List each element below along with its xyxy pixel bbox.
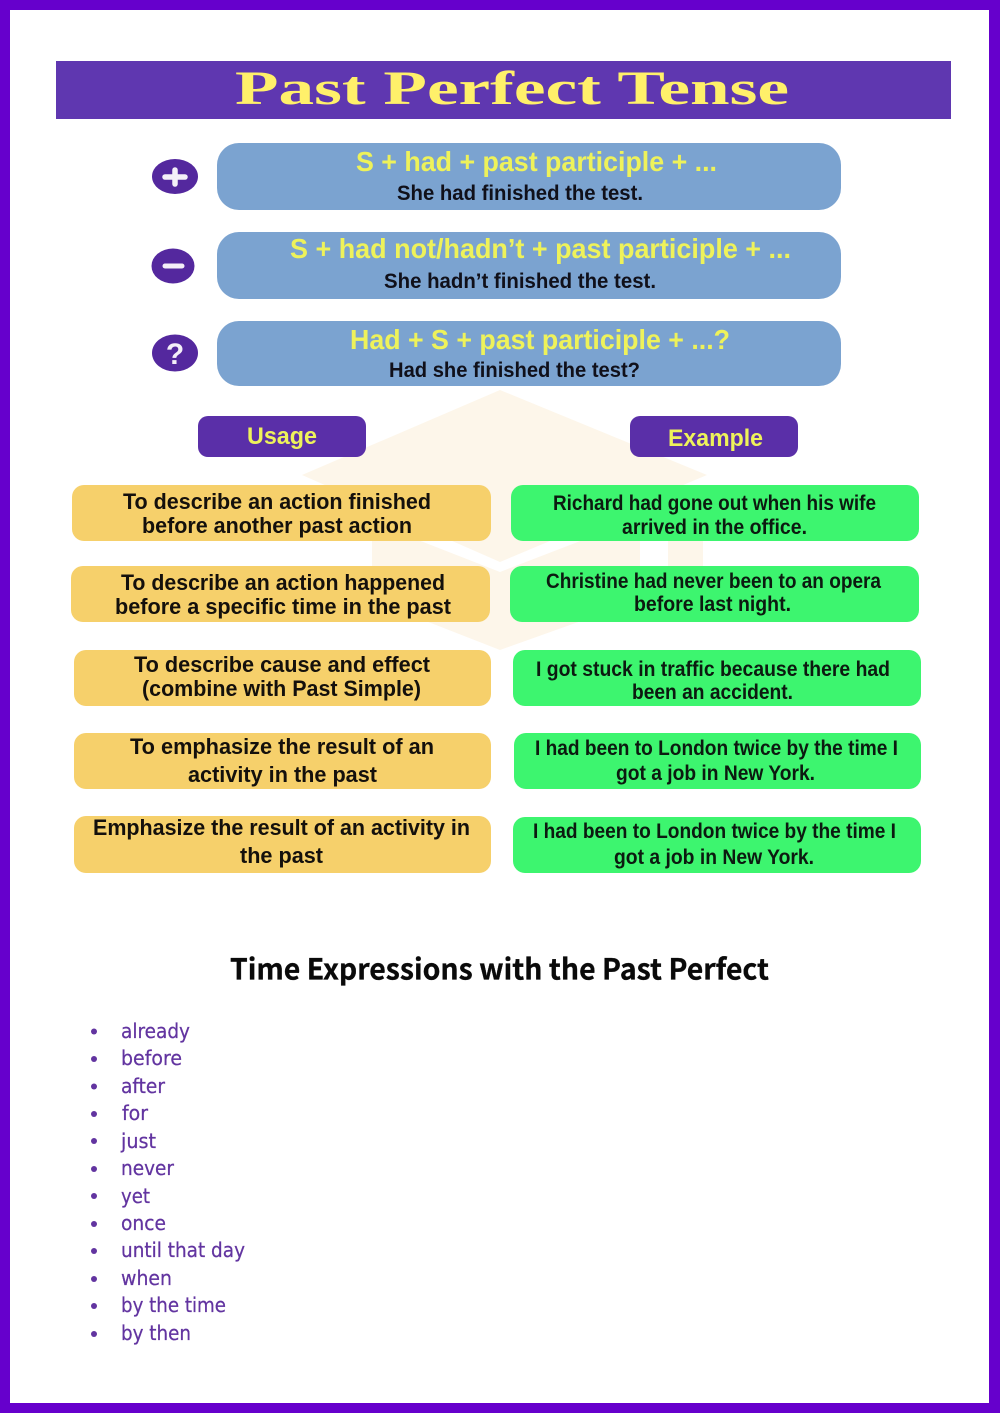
- usage heading: Usage: [247, 423, 317, 450]
- example card 5: got a job in New York.: [614, 846, 814, 869]
- usage card 2: To describe an action happened: [121, 570, 445, 595]
- time expressions list: yet: [121, 1184, 150, 1208]
- time expressions list: by then: [121, 1321, 191, 1345]
- example card 2: [510, 566, 919, 622]
- usage card 5: Emphasize the result of an activity in: [93, 815, 470, 840]
- example card 4: got a job in New York.: [616, 762, 815, 785]
- watermark: graduation cap: [302, 390, 707, 650]
- title banner: [56, 61, 951, 119]
- time expressions list: [91, 1019, 245, 1345]
- example card 3: been an accident.: [632, 681, 793, 704]
- negative box: [217, 232, 841, 299]
- time expressions list: already: [121, 1019, 190, 1043]
- usage card 1: before another past action: [142, 513, 412, 538]
- title: Past Perfect Tense: [235, 62, 789, 115]
- panel: positive form: [152, 143, 841, 210]
- usage card 3: (combine with Past Simple): [142, 676, 421, 701]
- time expressions list: for: [122, 1101, 149, 1125]
- usage card 1: [72, 485, 491, 541]
- icon: question mark: ?: [166, 338, 184, 371]
- example card 2: Christine had never been to an opera: [546, 570, 881, 593]
- usage card 1: To describe an action finished: [123, 489, 431, 514]
- usage card 3: To describe cause and effect: [134, 652, 431, 677]
- negative formula: S + had not/hadn’t + past participle + ...: [290, 233, 791, 264]
- usage card 3: [74, 650, 491, 706]
- positive example: She had finished the test.: [397, 182, 643, 205]
- example card 4: [514, 733, 921, 789]
- time expressions heading: Time Expressions with the Past Perfect: [230, 946, 769, 988]
- time expressions list: before: [121, 1046, 182, 1070]
- negative example: She hadn’t finished the test.: [384, 270, 656, 293]
- panel: question form: [152, 321, 841, 386]
- time expressions list: once: [121, 1211, 166, 1235]
- panel: negative form: [152, 232, 841, 299]
- usage card 5: [74, 815, 491, 873]
- example card 1: [511, 485, 919, 541]
- icon: plus: [152, 159, 198, 194]
- example card 2: before last night.: [634, 593, 791, 616]
- icon: minus: [152, 248, 194, 284]
- example card 3: I got stuck in traffic because there had: [536, 658, 890, 681]
- example card 5: I had been to London twice by the time I: [533, 820, 896, 843]
- positive formula: S + had + past participle + ...: [356, 146, 717, 177]
- example card 1: Richard had gone out when his wife: [553, 492, 876, 515]
- example heading: [630, 416, 798, 457]
- icon: question mark: [152, 334, 198, 372]
- example card 3: [513, 650, 921, 706]
- time expressions list: just: [120, 1129, 156, 1153]
- time expressions list: never: [121, 1156, 175, 1180]
- usage card 4: To emphasize the result of an: [130, 734, 434, 759]
- example card 5: [513, 817, 921, 873]
- usage card 4: activity in the past: [188, 762, 378, 787]
- usage heading: [198, 416, 366, 457]
- example heading: Example: [668, 425, 763, 452]
- example card 4: I had been to London twice by the time I: [535, 737, 898, 760]
- usage card 5: the past: [240, 843, 324, 868]
- usage card 4: [74, 733, 491, 789]
- time expressions list: when: [121, 1266, 172, 1290]
- example card 1: arrived in the office.: [622, 516, 807, 539]
- positive box: [217, 143, 841, 210]
- question box: [217, 321, 841, 386]
- time expressions list: by the time: [121, 1293, 226, 1317]
- time expressions list: until that day: [121, 1238, 245, 1262]
- usage card 2: [71, 566, 490, 622]
- question example: Had she finished the test?: [389, 359, 640, 382]
- question formula: Had + S + past participle + ...?: [350, 324, 730, 355]
- time expressions list: after: [121, 1074, 166, 1098]
- usage card 2: before a specific time in the past: [115, 594, 452, 619]
